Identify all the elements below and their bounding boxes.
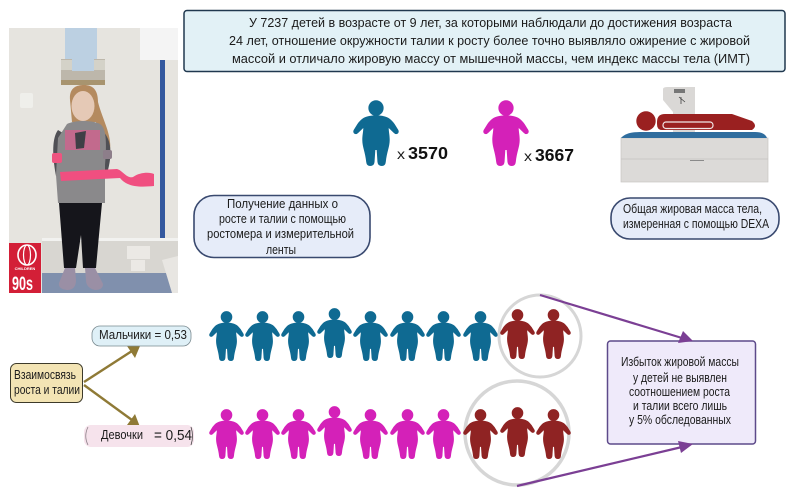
callout: DEXA: Общая жировая масса тела, (623, 201, 762, 216)
logo: Children of the 90s (9, 243, 41, 295)
icon and count: boys: 3570 (408, 143, 448, 163)
row of boys icons (209, 308, 498, 361)
label: boys coefficient (92, 326, 191, 346)
icon and count: boys: х (397, 146, 405, 162)
icon and count: girls: х (524, 148, 532, 164)
label: height and waist relationship (10, 364, 82, 402)
icon: DEXA scanner (621, 87, 768, 182)
logo: Children of the 90s: CHILDREN (15, 266, 35, 271)
icon and count: boys (353, 100, 448, 166)
callout: stadiometer and tape: ленты (266, 242, 296, 257)
icon and count: girls (483, 100, 574, 166)
top summary box: массой и отличало жировую массу от мышечной массы, чем индекс массы тела (ИМТ) (232, 51, 750, 66)
row of girls icons (209, 406, 461, 459)
label: boys coefficient: Мальчики = 0,53 (99, 327, 187, 342)
logo: Children of the 90s: 90s (12, 274, 33, 295)
top summary box: У 7237 детей в возрасте от 9 лет, за которыми наблюдали до достижения возраста (249, 15, 733, 30)
callout: stadiometer and tape: росте и талии с помощью (219, 211, 346, 226)
label: girls coefficient: = 0,54 (154, 428, 192, 444)
callout: stadiometer and tape: Получение данных о (227, 196, 338, 211)
arrow: to boys (84, 346, 140, 382)
highlight circle: boys (499, 295, 581, 377)
result box: excess fat mass: у детей не выявлен (633, 370, 727, 385)
arrow: boys circle to result (540, 295, 693, 343)
label: girls coefficient (84, 425, 194, 447)
arrow: to girls (84, 385, 140, 427)
undetected boys icons (500, 309, 571, 359)
callout: stadiometer and tape (194, 196, 370, 258)
top summary box (184, 10, 785, 72)
callout: DEXA (611, 198, 779, 239)
label: height and waist relationship: роста и талии (14, 383, 80, 397)
callout: stadiometer and tape: ростомера и измерительной (207, 226, 354, 241)
top summary box: 24 лет, отношение окружности талии к росту более точно выявляло ожирение с жировой (229, 33, 750, 48)
result box: excess fat mass: и талии всего лишь (633, 398, 727, 413)
icon and count: girls: 3667 (535, 145, 574, 165)
highlight circle: girls (465, 381, 569, 485)
result box: excess fat mass: Избыток жировой массы (621, 354, 739, 369)
result box: excess fat mass: соотношением роста (629, 384, 731, 399)
arrow: girls circle to result (517, 441, 693, 486)
result box: excess fat mass: у 5% обследованных (629, 412, 731, 427)
photo: child measured with stadiometer and tape (9, 28, 178, 295)
label: height and waist relationship: Взаимосвязь (14, 368, 76, 382)
undetected girls icons (463, 407, 571, 459)
label: girls coefficient: Девочки (101, 428, 143, 442)
hair (70, 85, 110, 152)
result box: excess fat mass (608, 341, 756, 444)
